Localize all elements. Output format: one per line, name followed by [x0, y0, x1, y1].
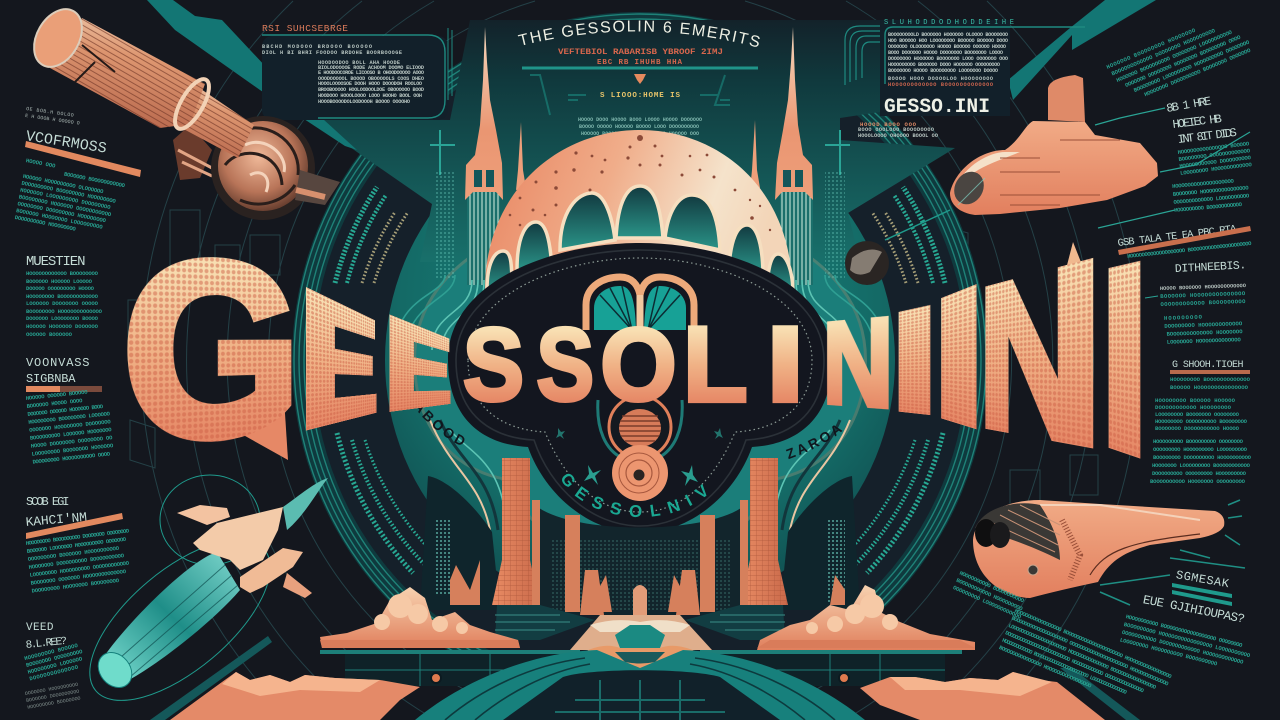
- lower notes: BOOOOOOOOOO HOOOOOOO OOOOOOOOO: [1150, 478, 1246, 485]
- right column: top note: HOOOOOO BOOOOOOOOO OOOOOOOO LOOOOOOOOOO: [1115, 28, 1234, 84]
- body text: HOOOOOOO DOOOOOOOOO BOOOOOOOOOO: [28, 552, 125, 571]
- notes text: OOODOOOOOL BOOOD OBOOOOOLS COOS DHEO: [318, 76, 424, 82]
- arched gate: [633, 585, 647, 615]
- footnote: HOOOOOOOO BOOOOOOO: [27, 696, 81, 711]
- symbol: double arch with fans: [586, 277, 694, 330]
- body text: HOOOOOOOO LOOOOOO: [27, 655, 84, 676]
- body text: BOOOOOOOOO HOOOOOOOOOOOOOOOO LOOOOOOOOOO: [1123, 621, 1252, 659]
- panel: top-right notes: [845, 19, 1085, 139]
- road: [415, 650, 865, 720]
- lower notes: HOOOOOOOO OOOOOOOOOO BOOOOOOOO: [1155, 418, 1248, 425]
- right column: top note: BOOOOOOOO LOOOOOOOOO HOOOOOOOOO OOOOOOOO: [1133, 38, 1251, 94]
- body text: BOOOOOO HOOOOOOO LOOOOOOOOO: [16, 207, 104, 231]
- accent stripes: [1172, 583, 1232, 598]
- lower notes: LOOOOOOOO BOOOOOOO OOOOOOOO: [1155, 411, 1240, 418]
- body text: HOOOOOOOO BOOOOOOOOO DOOOOOOO OOOOOOOO: [25, 527, 130, 547]
- mini note: [25, 106, 81, 127]
- notes text: BBCHD MODOOO BRDOOO BOOOOO: [262, 44, 372, 50]
- left column: [492, 458, 540, 605]
- upper notes: [1160, 283, 1248, 346]
- accent bar: [26, 513, 123, 539]
- yellow label: S LIOOO:HOME IS: [600, 92, 680, 100]
- body text: HOOOO OOO: [25, 157, 57, 170]
- body text: [25, 527, 136, 595]
- right column: top note: BOOOOOOOOOOOO DOOOOOOO HOOOOOOOOO: [1110, 27, 1217, 77]
- bottom clouds right: [860, 668, 1140, 720]
- bottom-right ship illustration: [973, 500, 1245, 605]
- long text: DOOOOOOOOOOOOOOOOOOOOOOOOOO HOOOOOOOOOOOO OOOOOOOOOOOOOOOO: [1004, 629, 1145, 695]
- second body text: [1172, 176, 1251, 214]
- long text: HOOOOOOOOOOOO BOOOOOOOOOOOOOOOOOOOOOOO LOOOOOOOOOOOOOOO: [1001, 637, 1129, 696]
- body text: [24, 641, 87, 682]
- body text: [26, 270, 103, 338]
- upper notes: OOOOOOOOOOOO BOOOOOOOOO: [1160, 298, 1246, 308]
- lower notes: [1150, 376, 1252, 485]
- heading: MUESTIEN: MUESTIEN: [26, 254, 86, 270]
- gauge icons: [431, 673, 441, 683]
- panel: top-right notes: HOOOOOOOOOOOO BOOOOOOOOOOOOO: [888, 82, 993, 88]
- lower city: [420, 458, 860, 640]
- panel: top-left notes: [262, 23, 452, 120]
- small note lines: HOOOLOOOO OHOOOO BOOOL OO: [858, 133, 938, 139]
- body text: OOOOOOOOO BOOOOOO HOOOOOOOOOO: [27, 545, 120, 563]
- body text: LOOOOOOOO BOOOOOOO HOOOOOO: [31, 442, 114, 458]
- title: N: [823, 291, 894, 436]
- platform: [320, 650, 962, 686]
- dome: [485, 130, 793, 290]
- body text: BOOOOOOO OOOOOOOOO: [25, 648, 84, 669]
- accent bar: [25, 141, 141, 177]
- notes text: HOODOODOO BOLL AHA HOODE: [318, 60, 400, 66]
- lower-left text: [952, 569, 1029, 621]
- right column: callout: INT 8IT DIDS: [1177, 126, 1238, 147]
- body text: BOOOOOO BOOOOOOOOOOO: [63, 171, 126, 189]
- right diagonal teal strip: [1008, 0, 1156, 100]
- body text: OOOOOOOOOOO DOOOOOOOOOOOO HOOOOOOOOOOOO: [1121, 629, 1245, 666]
- left column: block 4: [25, 495, 136, 595]
- title: O: [600, 308, 677, 423]
- heading: VOONVASS: VOONVASS: [26, 356, 90, 370]
- lower notes: BOOOOOOO DOOOOOOOOOO HOOOO: [1155, 425, 1240, 432]
- icon: small emblem: [634, 74, 646, 84]
- mini note: OE BOB.H BOLOO: [26, 106, 74, 119]
- body text: DOOOOOO OOOOOO HOOOOOO BOOO: [27, 403, 104, 418]
- left column: block 5: [24, 622, 87, 711]
- upper notes: BOOOOOOOOOOOOO HOOOOOOO: [1166, 328, 1243, 338]
- body text: BOOOOOOOO OOOOOOOOOOOOO: [1178, 147, 1251, 163]
- notes text: HOOOBOOOODOLOODOOOH BOOOO OOOOHO: [318, 99, 410, 105]
- right column: [740, 458, 788, 605]
- body text: HOOOOOOOOOOOO BOOOOOOOO: [26, 270, 99, 277]
- divider bar: [522, 66, 758, 70]
- small label: G SHOOH.TIOEH: [1172, 360, 1244, 371]
- bottom-right notes: [952, 568, 1253, 717]
- right column: top note: OOOOOOO DOOOOOOO HOOOOOOO BOOOOOOOO OOOO: [1124, 33, 1242, 89]
- heading: SCOBEGI: SCOB EGI: [26, 495, 70, 509]
- body text: BOOOOOOOO HOOOOOO OOOOOOOOOOO: [18, 193, 112, 218]
- wavy contour lines: [430, 420, 850, 530]
- second body text: HOOOOOOOOO BOOOOOOOOOOO: [1174, 201, 1243, 214]
- symbol: concentric disc: [612, 445, 668, 501]
- heading: VEED: VEED: [26, 622, 54, 634]
- faded text rows: HOOOO DOOO HOOOO BOOO LOOOO HOOOO DOOOOOO: [578, 117, 702, 123]
- headline: THE GESSOLIN 6 EMERITS: [518, 20, 760, 47]
- upper notes: HOOOO BOOOOOO HOOOOOOOOOOOO: [1160, 283, 1246, 292]
- bottom clouds left: [150, 636, 420, 720]
- right column: top note: HOOOOOO BOOOOOOOO HOOOOOOO: [1105, 27, 1197, 71]
- lower notes: HOOOOOOOO BOOOOO HOOOOO: [1155, 397, 1236, 404]
- central emblem: [448, 243, 828, 528]
- notes text: HOODOOO HOOOLOOOO LOOO HOOHO BOOL OOH: [318, 93, 422, 99]
- body text: HOOOOOOOOOO BOOOOOOOOOOOOOOOOOO OOOOOOOO: [1125, 613, 1244, 649]
- second body text: BOOOOOOO HOOOOOOOOOOOOOOO: [1173, 184, 1249, 198]
- title letter extensions: [238, 242, 1092, 460]
- body text: DOOOOOOOO HOOOOOOO BOOOOOOOO: [31, 577, 120, 595]
- right column: notes: [1150, 283, 1252, 485]
- lower-left text: HOOOOOOOOOO BOOOOOOOOOO: [958, 569, 1026, 605]
- notes text: E HOODOOCOROE LICOOSO B OHOODOOOOO AOOO: [318, 70, 424, 76]
- top headline block: [518, 20, 760, 137]
- body text: DOOOOO OOOOOOOOO HOOOO: [26, 285, 95, 292]
- small note lines: [858, 121, 938, 139]
- body text: HOOOOOOOO BOOOOOOOOOOOO: [26, 293, 99, 300]
- panel: top-right notes: BOOOO HOOO DOOOOLOO HOOOOOOOO: [888, 76, 993, 82]
- center dark building: [535, 505, 745, 615]
- title: S: [536, 308, 594, 423]
- lower notes: OOOOOOOOO HOOOOOOOOO LOOOOOOOOO: [1153, 446, 1248, 453]
- notes text: DIOL H BI BHRI FOODOO BRDOHE BOORBOOOGE: [262, 50, 402, 56]
- lower-left text: BOOOOOOOOOOO HOOOOOOOOO: [955, 577, 1024, 613]
- ring lettering: ABOOD: [418, 408, 464, 445]
- body text: LOOOOOOOO HOOOOOOOOOOOO: [1180, 161, 1253, 177]
- heading: VCOFRMOSS: VCOFRMOSS: [25, 128, 108, 158]
- body text: [25, 386, 115, 466]
- notes text: [262, 44, 424, 105]
- lower notes: BOOOOO HOOOOOOOOOOOOOOO: [1170, 384, 1249, 391]
- notes text: BROOBOOOOO HOOLOODOOLDOE OBOOOOOO BOOD: [318, 87, 424, 93]
- body text: LOOOOOO DOOOOOOO OOOOO: [26, 300, 99, 307]
- body text: HOOOOOOOO BOOOOOOOO LOOOOOO: [28, 410, 111, 426]
- long text: BOOOOOOOOOOOOOOOOOOOOO OOOOOOOOOOOOOOOOOOOOOOO HOOOOOOOOOOOOOO: [1010, 615, 1170, 688]
- body text: HOOOOOO LOOOOOOOOO DOOOOOOOO: [20, 187, 112, 211]
- panel: top-right notes: BOOOOOOOOLD BOOOOOO HOOOOOO OLOOOO BOOOOOOO: [888, 32, 1008, 38]
- right column: section heading block: [1117, 223, 1252, 298]
- body text: DOOOOOOOOO HOOOOOOOO: [14, 214, 77, 233]
- central teal circle with ring: [292, 12, 988, 708]
- teal band around emblem: [437, 232, 843, 545]
- body text: BOOOOOOO OOOOOOO HOOOOOOOOOOOOO: [30, 568, 127, 587]
- long text: LOOOOOOOOOOOOOOOOOOOOOO HOOOOOOOOOOOOOOO BOOOOOOOOOOOOOOOOO: [1007, 622, 1158, 691]
- body text: [1177, 140, 1253, 177]
- panel: top-right notes: HOO BOOOOO HOO LOOOOOOOO BOOOOO BOOOOO DOOO: [888, 38, 1008, 44]
- body text: BOOOOOO HOOOO OOOO: [26, 397, 83, 410]
- notes text: HOOOLOOOOSOE DOOH HOOO DOOODOH ROOLOO: [318, 81, 422, 87]
- teal row: HOOOOOOOOOOOOOOOOOOO BOOOOOOOOOOOOOOOOOOOOO: [1127, 240, 1252, 260]
- heading: eue: EUE GJIHIOUPAS?: [1142, 593, 1246, 627]
- upper notes: DOOOOOOOO HOOOOOOOOOOOO: [1164, 320, 1243, 330]
- upper notes: BOOOOOO HOOOOOOOOOOOOOO: [1160, 290, 1246, 300]
- left column: block 3: [25, 356, 115, 466]
- body text: [1119, 613, 1253, 675]
- small note lines: HOOOD BOOO OOO: [860, 121, 917, 128]
- left tower: [395, 27, 526, 352]
- body text: LOOOOOOOO HOOOOOOOOO BOOOOOOOOO: [1119, 636, 1219, 668]
- body text: OOOOOOOO DOOOOOOOO HOOOOOOOO: [17, 200, 107, 224]
- heading lines: 8B 1 HRE: [1165, 94, 1213, 116]
- right tower: [750, 27, 885, 352]
- lower notes: BOOOOOOOO DOOOOOOOOO HOOOOOOOOOO: [1153, 454, 1252, 461]
- faint outer blueprint arcs: [128, 1, 1139, 719]
- title: I: [766, 305, 804, 425]
- lower-left text: OOOOOOOOO LOOOOOOOOOOOO: [952, 584, 1023, 621]
- symbol: ringed striped sphere: [598, 396, 682, 458]
- body text: HOOOOOOOO BOOOOO: [24, 642, 79, 662]
- central stream: [570, 615, 712, 670]
- submarine illustration: [845, 75, 1158, 285]
- ring lettering: [418, 408, 842, 460]
- right column: callout: HOEIEC HB: [1172, 112, 1223, 132]
- panel: top-right notes: DOOOOOOO HOOOOOO BOOOOOOO LOOO OOOOOOO OOO: [888, 56, 1008, 62]
- star ornaments: [556, 428, 723, 486]
- body text: BOOOOOOOO HOOOOOOOOOOOOO: [26, 308, 103, 315]
- arches: [487, 186, 793, 290]
- clouds mid right: [757, 585, 975, 650]
- side buildings: [450, 500, 845, 615]
- body text: DOOOOOO LOOOOOOOO BOOOO: [26, 315, 99, 322]
- lower notes: HOOOOOOOOO BOOOOOOOOO OOOOOOOO: [1153, 438, 1244, 445]
- body text: [14, 157, 127, 240]
- body text: DOOOOOOOOOOOOO: [29, 663, 79, 682]
- faded text rows: HOOOOO BOOOOO OOOOOOO DOOOOO HOOOOO OOO: [581, 131, 699, 137]
- heading: 8.L.REE?: 8.L.REE?: [25, 636, 68, 652]
- heading: GSB TALA TE EA PBC RTA: [1117, 223, 1238, 250]
- leader lines: [1095, 108, 1250, 228]
- body text: OOOOOOO HOOOOOOOO DOOOOOOO: [29, 418, 112, 434]
- body text: LOOOOOOOO HOOOOOOOOO OOOOOOOOOOOO: [29, 560, 130, 579]
- body text: HOOOOO OOOOOO BOOOOO: [25, 388, 89, 402]
- body text: BOOOOOO LOOOOOOO HOOOOOOOOO OOOOOOO: [26, 536, 127, 555]
- accent row: [1170, 370, 1250, 374]
- footnote: BOOOOOO DOOOOOOOOO: [26, 689, 80, 704]
- faded text rows: BOOOO OOOOO HOOOOO BOOOO LOOO DOOOOOOOOO: [579, 124, 699, 130]
- footnote: OOOOOOO HOOOOOOOOO: [24, 682, 79, 697]
- curved greeked text columns: [335, 187, 435, 573]
- second body text: HOOOOOOOOOOOOOOOOOOO: [1172, 178, 1235, 190]
- panel: top-right notes: BOOOOOOO HOOOO BOOOOOOOO LOOOOOOO DOOOO: [888, 68, 998, 74]
- lower notes: DOOOOOOOOOOO HOOOOOOOO: [1155, 404, 1232, 411]
- body text: DOOOOOOOOO BOOOOOOOO HOOOOOOOO: [21, 180, 117, 205]
- title: S: [463, 308, 524, 423]
- left diagonal teal strip: [147, 0, 357, 150]
- subtitle: VEFTEBIOL RABARISB YBROOF 2IMJ: [558, 48, 723, 57]
- top teal field: [310, 20, 955, 262]
- body text: HOOOOOOOOOOO DOOOOOOOOO: [1179, 154, 1252, 170]
- dark side skies: [420, 476, 860, 610]
- body text: HOOOOOOOOOOOOOOO BOOOOO: [1177, 140, 1250, 156]
- second body text: OOOOOOOOOOOOO LOOOOOOOOOO: [1173, 192, 1250, 206]
- speckles: [509, 135, 771, 231]
- right column: top note: HOOOOOOO DOOOOOOOOO BOOOOOOO OOOOOOO: [1143, 47, 1252, 98]
- long text: HOOOOOOOOOOOOOOOOO BOOOOOOOOOOOOOOOOOOOOOO HOOOOOOOOOOOOOOOOO: [1013, 607, 1173, 680]
- rocket illustration: [64, 475, 328, 720]
- long text: BOOOOOOOOOOOOOOO HOOOOOOOOOOOOOOOOO: [998, 644, 1093, 690]
- small note lines: BOOO OOOLOOO BOOODOOOO: [858, 127, 934, 133]
- panel: top-right notes: HOOOOOOOOO BOOOOOO DOOO HOOOOOO OOOOOOOOO: [888, 62, 1000, 68]
- sub-subtitle: EBC RB IHUHB HHA: [597, 59, 682, 67]
- ring lettering: ZAROA: [786, 425, 842, 460]
- right column: callout: [1095, 94, 1253, 228]
- cannon illustration: [24, 1, 340, 220]
- notes text: BIOLODOOOOE RODE ACHOOM DOOMO ELIOOD: [318, 65, 424, 71]
- lower notes: HOOOOOOO LOOOOOOOOO BOOOOOOOOOOO: [1152, 462, 1251, 469]
- heading: SIGBNBA: SIGBNBA: [26, 372, 76, 386]
- asteroid: [845, 241, 889, 285]
- long text: [998, 607, 1173, 717]
- title: L: [683, 305, 748, 425]
- right column: top note: [1105, 9, 1254, 108]
- label: DITHNEEBIS.: [1175, 259, 1247, 276]
- left column: block 2: [26, 254, 103, 338]
- footnote: [24, 682, 81, 711]
- heading: RSI SUHCSEBRGE: [262, 23, 348, 34]
- body text: HOOOOO HOOOOOOOOO OLOOOOOO: [22, 173, 105, 195]
- body text: BOOOOOOOOO LOOOOOO HOOOOOOO: [30, 426, 113, 442]
- body text: DOOOOOOOO HOOOOOOOOOO OOOO: [32, 450, 111, 466]
- body text: BOOOOOO HOOOOO LOOOOO: [26, 278, 93, 285]
- lower notes: DOOOOOOOOO OOOOOOOOO HOOOOOOOOO: [1152, 470, 1247, 477]
- body text: HOOOO DOOOOOOO OOOOOOOO OO: [30, 434, 113, 450]
- label: GESSO.INI: GESSO.INI: [884, 96, 990, 119]
- accent bar: [1118, 226, 1251, 255]
- emblem lettering: GESSOLNIV: [562, 474, 706, 518]
- lower notes: HOOOOOOOO BOOOOOOOOOOOOO: [1170, 376, 1251, 383]
- mini note: E H OOOB H OOOOO O: [25, 113, 80, 127]
- heading: KAHCI'NM: KAHCI'NM: [25, 510, 88, 530]
- faded text rows: [578, 117, 702, 137]
- clouds mid left: [320, 587, 520, 648]
- header dots: SLUHODDODHODDEIHE: [884, 19, 1014, 27]
- body text: HOOOOO HOOOOOO DOOOOOO: [26, 323, 99, 330]
- body text: OOOOOO BOOOOOO: [26, 331, 73, 338]
- upper notes: HOOOOOOOO: [1164, 314, 1203, 322]
- panel: top-right notes: BOOO DOOOOOO HOOOO DOOOOOOO BOOOOOOO LOOOO: [888, 50, 1003, 56]
- upper notes: LOOOOOOO HOOOOOOOOOOOOO: [1167, 336, 1242, 346]
- panel: top-right notes: OOOOOOO OLOOOOOOO HOOOO BOOOOO OOOOOO HOOOO: [888, 44, 1006, 50]
- left column: block 1: [14, 106, 141, 240]
- heading: sgmesak: SGMESAK: [1175, 568, 1231, 591]
- accent bar: [26, 386, 102, 392]
- stepped plinths: [495, 605, 595, 640]
